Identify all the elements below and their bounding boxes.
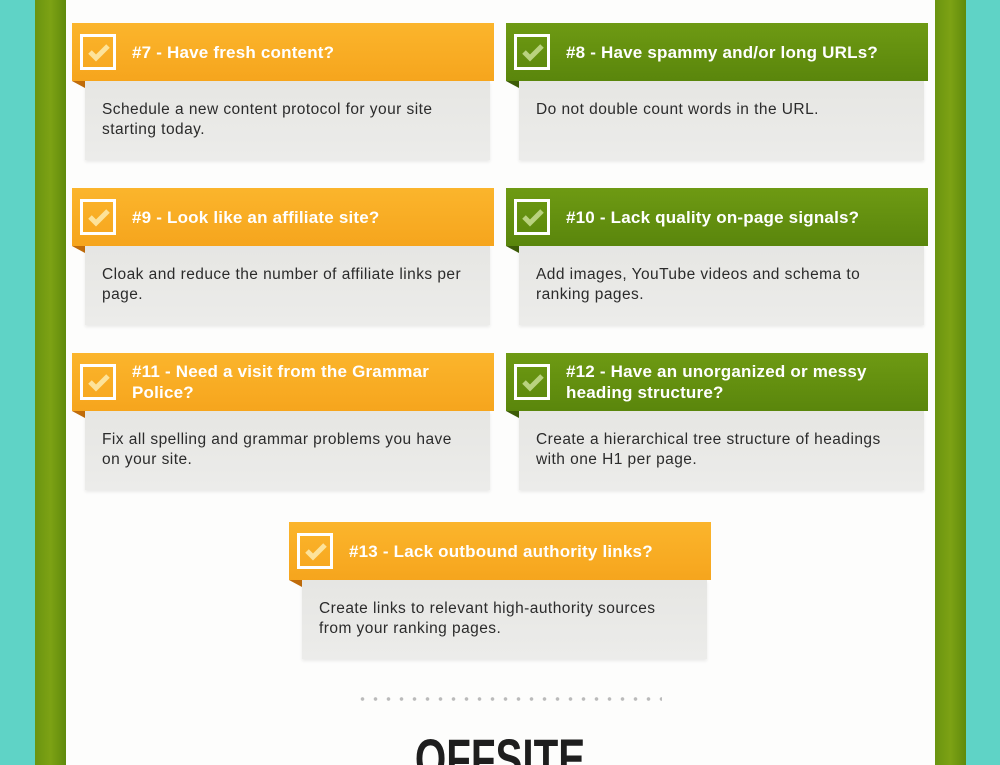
header #10 bbox=[506, 188, 928, 246]
body #9: Cloak and reduce the number of affiliate links per page. bbox=[102, 266, 461, 303]
card #9 bbox=[72, 188, 494, 327]
card #8 bbox=[506, 23, 928, 162]
header #10: #10 - Lack quality on-page signals? bbox=[566, 208, 859, 226]
header #7: #7 - Have fresh content? bbox=[132, 42, 334, 62]
body #9 bbox=[85, 246, 490, 325]
card #12 bbox=[506, 353, 928, 492]
header #13 bbox=[289, 522, 711, 580]
card #10 bbox=[506, 188, 928, 327]
body #11: Fix all spelling and grammar problems you have on your site. bbox=[102, 431, 452, 468]
header #12: #12 - Have an unorganized or messy heading structure? bbox=[566, 362, 867, 402]
body #10 bbox=[519, 246, 924, 325]
body #12 bbox=[519, 411, 924, 490]
body #12: Create a hierarchical tree structure of headings with one H1 per page. bbox=[536, 431, 881, 468]
header #11: #11 - Need a visit from the Grammar Police? bbox=[132, 362, 429, 402]
body #7 bbox=[85, 81, 490, 160]
header #9: #9 - Look like an affiliate site? bbox=[132, 208, 380, 226]
card #11 bbox=[72, 353, 494, 492]
body #11 bbox=[85, 411, 490, 490]
header #7 bbox=[72, 23, 494, 81]
card #13 bbox=[289, 522, 711, 661]
body #8 bbox=[519, 81, 924, 160]
header #9 bbox=[72, 188, 494, 246]
header #11 bbox=[72, 353, 494, 411]
header #12 bbox=[506, 353, 928, 411]
header #8: #8 - Have spammy and/or long URLs? bbox=[566, 42, 878, 62]
header #8 bbox=[506, 23, 928, 81]
body #10: Add images, YouTube videos and schema to ranking pages. bbox=[536, 266, 860, 303]
body #8: Do not double count words in the URL. bbox=[536, 101, 819, 118]
body #13: Create links to relevant high-authority sources from your ranking pages. bbox=[319, 600, 655, 637]
body #7: Schedule a new content protocol for your site starting today. bbox=[102, 101, 432, 138]
card #7 bbox=[72, 23, 494, 162]
body #13 bbox=[302, 580, 707, 659]
header #13: #13 - Lack outbound authority links? bbox=[349, 542, 653, 560]
